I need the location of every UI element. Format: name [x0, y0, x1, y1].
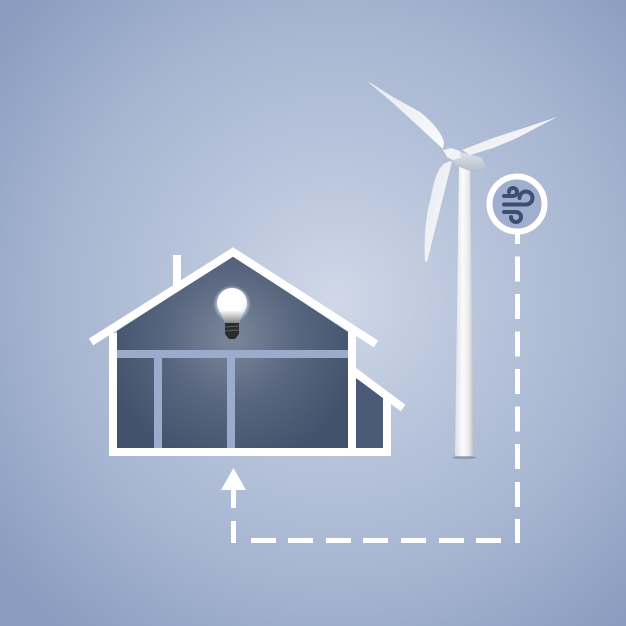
hub — [443, 148, 461, 160]
left room — [117, 358, 154, 448]
attic room — [117, 256, 348, 350]
dashed connector — [231, 233, 520, 543]
nacelle — [453, 152, 486, 172]
blade: lower — [425, 161, 452, 262]
house outline — [91, 252, 403, 452]
icon: wind — [504, 188, 532, 222]
wind badge — [490, 176, 544, 232]
blade: right — [462, 117, 557, 155]
tower — [455, 165, 474, 458]
middle room — [162, 358, 227, 448]
interior columns — [154, 358, 235, 448]
floor beam — [117, 350, 348, 358]
arrow — [221, 468, 246, 508]
right room — [235, 358, 348, 448]
wind turbine — [368, 82, 557, 459]
annex room — [356, 378, 383, 448]
blade: upper left — [368, 82, 444, 149]
house — [91, 252, 403, 452]
tower base shadow — [452, 456, 476, 459]
icon: light bulb — [213, 285, 251, 339]
